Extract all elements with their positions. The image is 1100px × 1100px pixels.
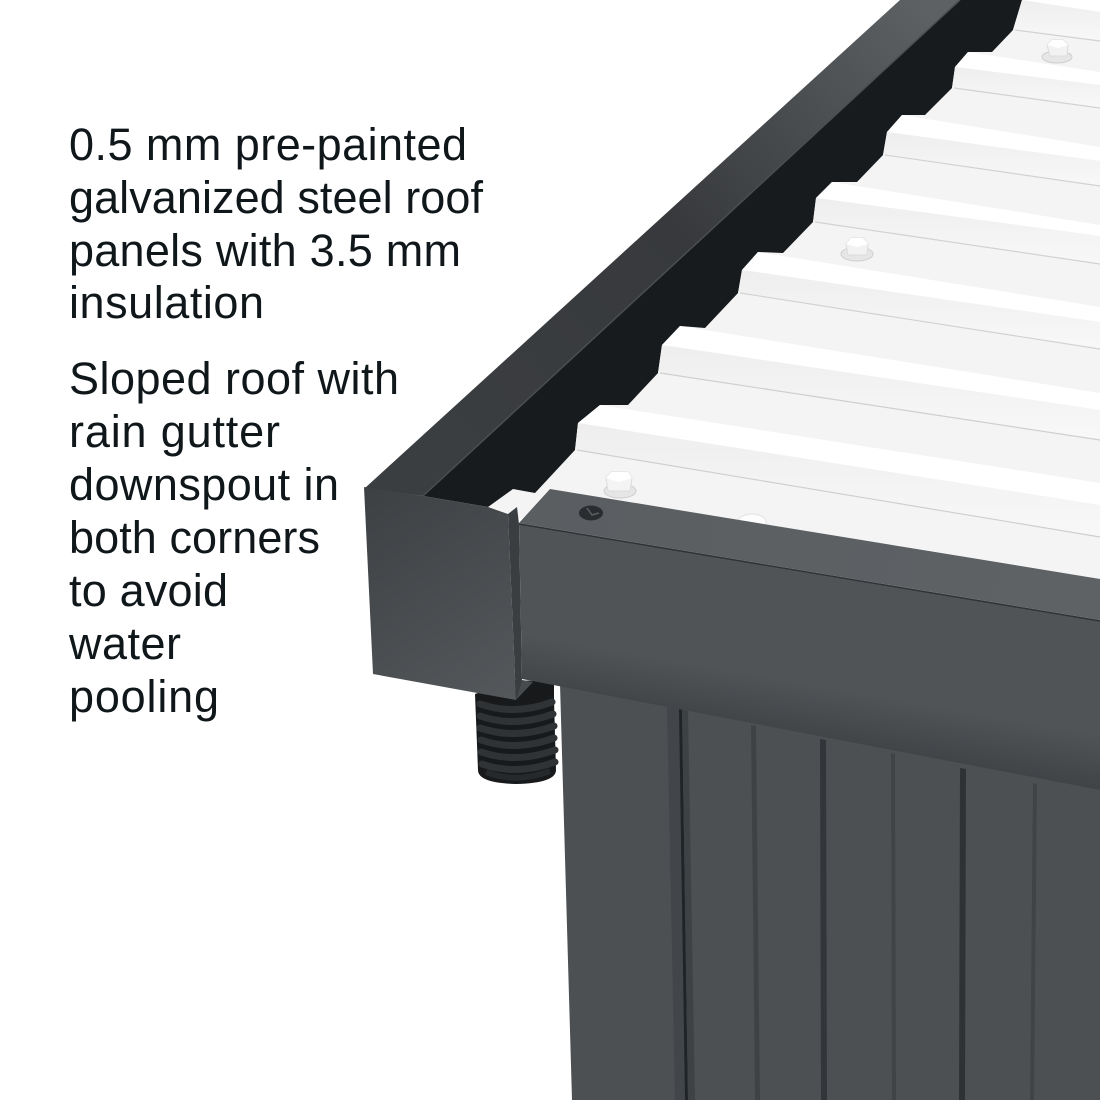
icon: hex bolt partly hidden [738, 514, 766, 530]
text block: roof panels: galvanized steel roof [69, 172, 483, 223]
text block: sloped roof and gutter: Sloped roof with [69, 353, 399, 404]
gutter seam strip [508, 507, 522, 700]
shed roof illustration [364, 0, 1100, 1100]
downspout ribbed pipe [475, 680, 556, 784]
text block: roof panels: insulation [69, 277, 264, 328]
gutter corner front face [364, 487, 516, 700]
corrugated roof ribs [575, 0, 1100, 537]
shed wall panel [560, 684, 1100, 1100]
text block: roof panels: panels with 3.5 mm [69, 225, 461, 276]
text block: roof panels: 0.5 mm pre-painted [69, 119, 467, 170]
left gutter wall top [365, 0, 960, 496]
icon: hex bolt top [1042, 40, 1072, 63]
white roof panel base [488, 0, 1100, 625]
front fascia face [519, 523, 1100, 790]
text block: sloped roof and gutter: rain gutter [69, 406, 280, 457]
text block: sloped roof and gutter: pooling [69, 671, 219, 722]
icon: hex bolt middle [841, 238, 873, 261]
text block: sloped roof and gutter [68, 353, 399, 722]
text block: sloped roof and gutter: water [68, 618, 181, 669]
fascia top lip [519, 489, 1100, 620]
text block: sloped roof and gutter: both corners [69, 512, 320, 563]
gutter underside bracket [516, 680, 533, 700]
icon: hex bolt lower [604, 472, 636, 498]
wall grooves [667, 706, 1037, 1100]
black gutter channel [423, 0, 1040, 520]
text block: sloped roof and gutter: to avoid [69, 565, 228, 616]
icon: screw on fascia lip [579, 506, 603, 520]
text block: roof panels [69, 119, 483, 328]
text block: sloped roof and gutter: downspout in [69, 459, 339, 510]
